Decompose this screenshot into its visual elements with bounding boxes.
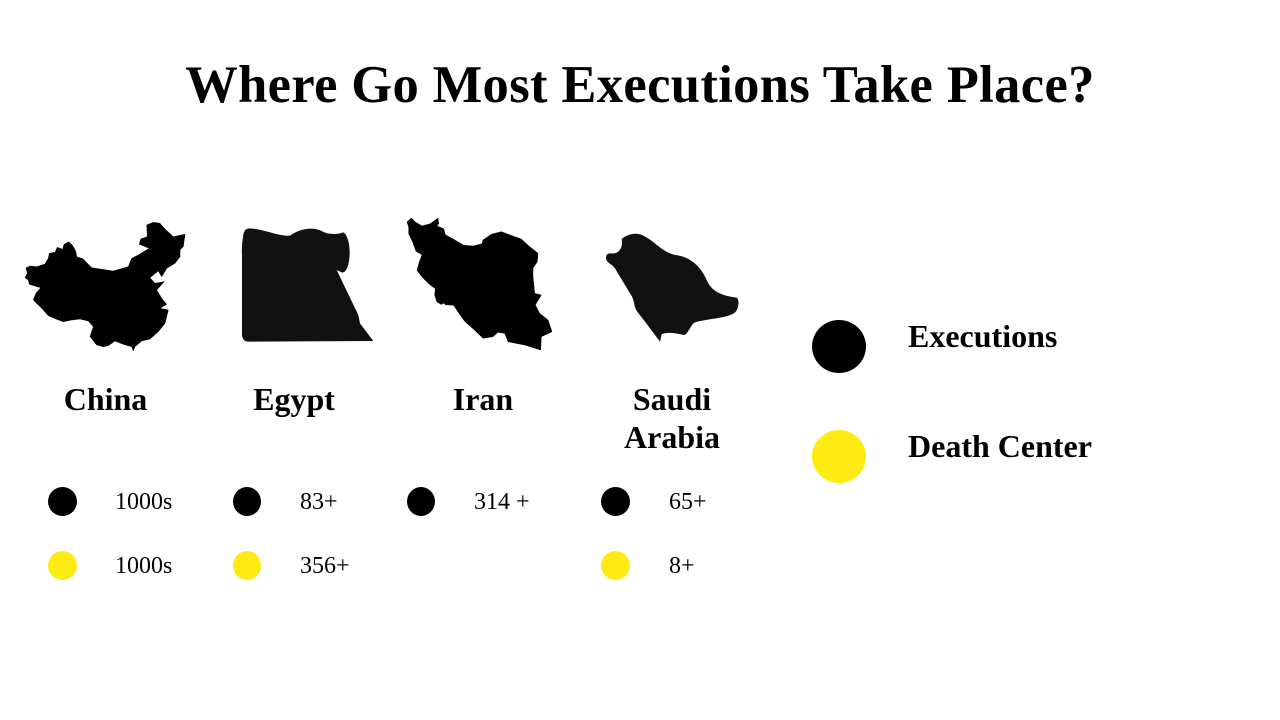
China death center value: 1000s <box>115 553 172 579</box>
heading: Saudi Arabia: Saudi <box>633 381 711 417</box>
Egypt death center marker <box>233 551 261 580</box>
heading: Egypt: Egypt <box>253 381 335 417</box>
title: Where Go Most Executions Take Place? <box>185 56 1095 114</box>
heading: Iran: Iran <box>453 381 513 417</box>
heading: Saudi Arabia <box>624 381 720 455</box>
China death center marker <box>48 551 77 580</box>
legend marker: Executions <box>812 320 866 373</box>
China executions value: 1000s <box>115 489 172 515</box>
legend marker: Death Center <box>812 430 866 483</box>
heading: China: China <box>64 381 147 417</box>
Egypt executions value: 83+ <box>300 489 338 515</box>
Iran executions value: 314 + <box>474 489 530 515</box>
Saudi Arabia death center value: 8+ <box>669 553 695 579</box>
China executions marker <box>48 487 77 516</box>
legend label: Executions: Executions <box>908 318 1057 354</box>
legend label: Death Center: Death Center <box>908 428 1092 464</box>
Iran executions marker <box>407 487 435 516</box>
Saudi Arabia executions marker <box>601 487 630 516</box>
Saudi Arabia death center marker <box>601 551 630 580</box>
Egypt death center value: 356+ <box>300 553 350 579</box>
Egypt executions marker <box>233 487 261 516</box>
Saudi Arabia executions value: 65+ <box>669 489 707 515</box>
heading: Saudi Arabia: Arabia <box>624 419 720 455</box>
